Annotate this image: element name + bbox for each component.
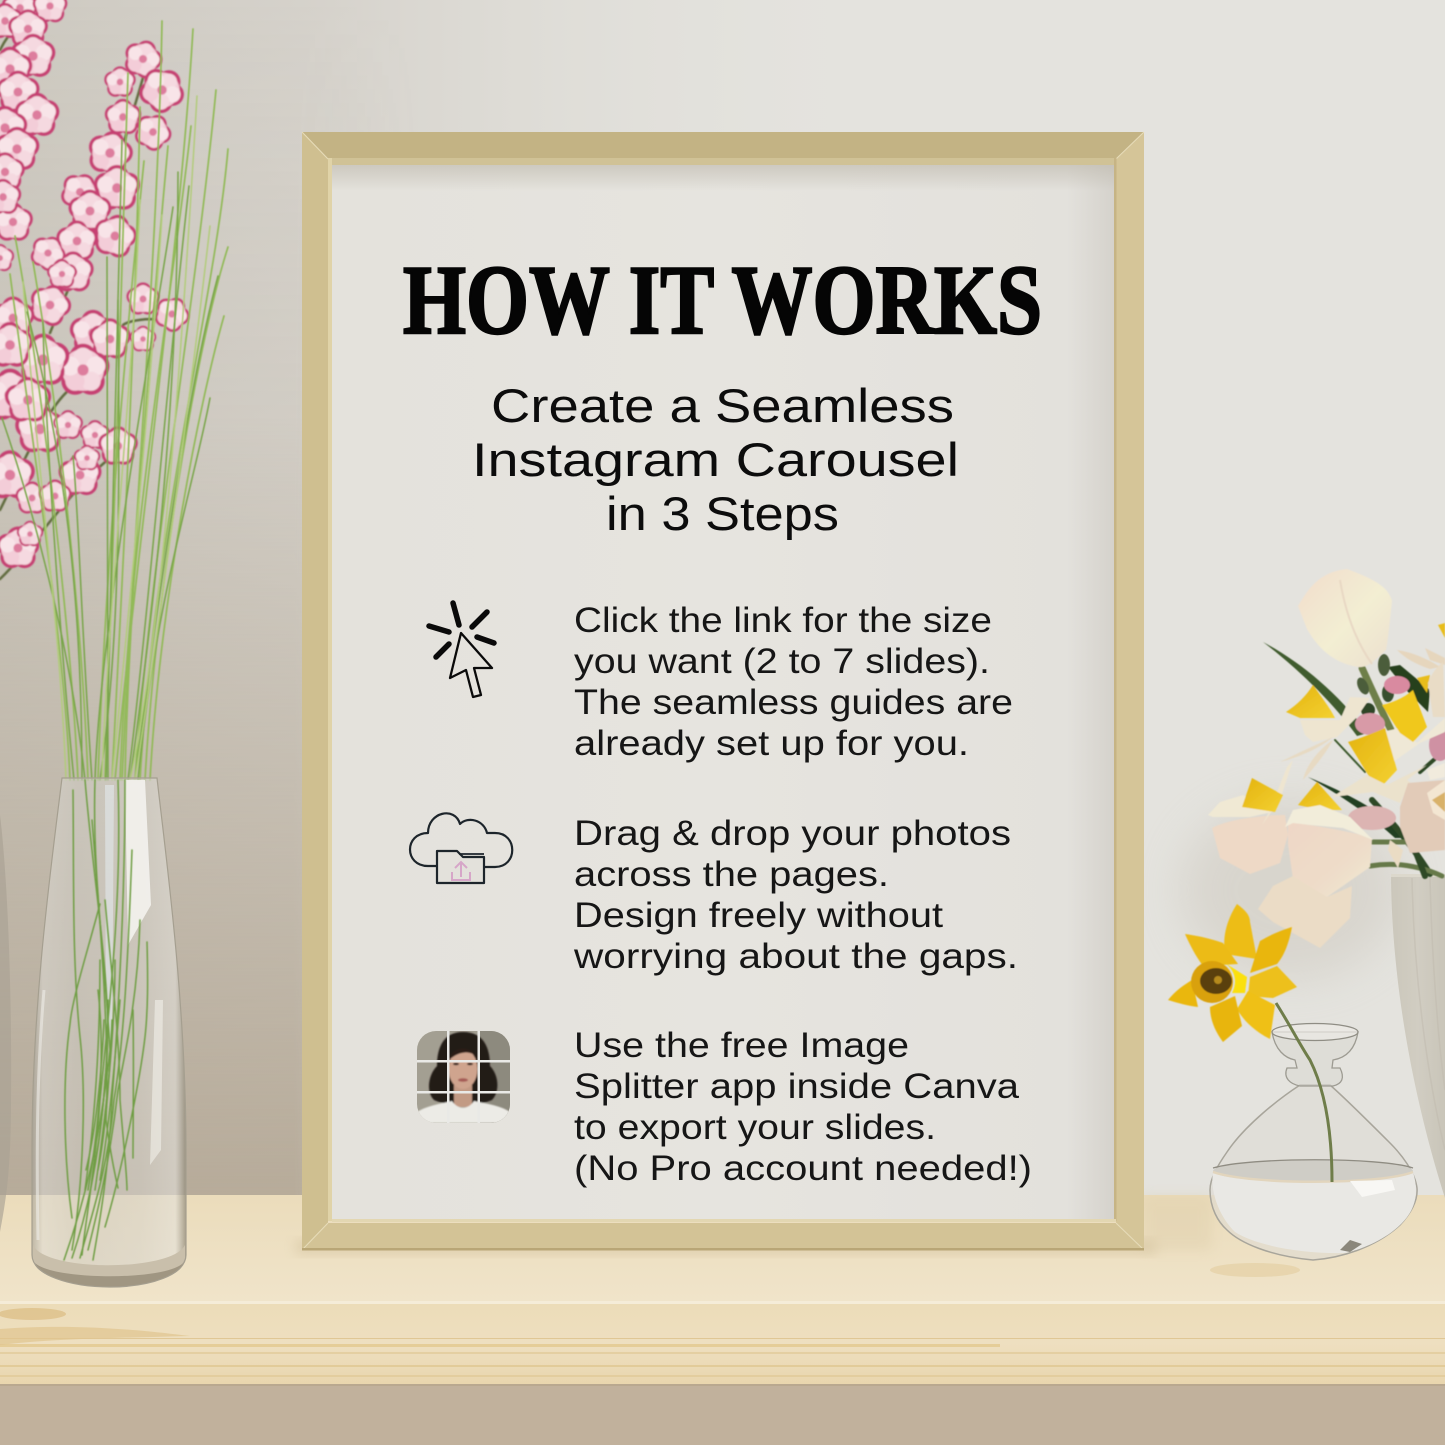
- icon: cursor click: [429, 603, 494, 697]
- middle blossom cluster: [0, 297, 138, 568]
- green leaves and stems: [1263, 642, 1445, 876]
- step 2 text: Design freely without: [574, 896, 943, 935]
- yellow daffodil cup center: [1298, 782, 1342, 810]
- left peach tulip: [1208, 760, 1293, 874]
- right peach tulip: [1388, 763, 1445, 868]
- frame sides: [302, 132, 1144, 159]
- ribbed cream vase at right edge: [1391, 874, 1445, 1198]
- frame drop shadow: [296, 1195, 1212, 1254]
- yellow daffodil: [1168, 904, 1297, 1042]
- step 1 text: you want (2 to 7 slides).: [574, 642, 990, 681]
- small glass vase with water: [1210, 1003, 1417, 1260]
- base of vase: [33, 1245, 185, 1287]
- vase neck and cup: [1272, 1032, 1358, 1086]
- subtitle: in 3 Steps: [606, 487, 839, 540]
- step 2: [410, 813, 1018, 976]
- top-left blossom cluster: [0, 0, 67, 271]
- poster frame: [302, 132, 1144, 1250]
- stems inside vase: [64, 780, 148, 1260]
- glass body: [1210, 1085, 1417, 1260]
- left background vase edge: [0, 815, 11, 1232]
- step 1 text: already set up for you.: [574, 724, 969, 763]
- main blossom sprig: [24, 35, 196, 351]
- green grass stems above vase: [2, 21, 228, 780]
- step 1 text: Click the link for the size: [574, 601, 992, 640]
- water in vase: [1212, 1172, 1416, 1253]
- step 3 text: Use the free Image: [574, 1026, 909, 1065]
- subtitle: Instagram Carousel: [472, 433, 959, 486]
- vase highlight: [125, 780, 151, 945]
- step 3 text: [574, 1026, 1032, 1188]
- daffodil with cream petals, left: [1280, 685, 1370, 780]
- glass vase with stems: [32, 778, 186, 1287]
- step 3 text: Splitter app inside Canva: [574, 1067, 1020, 1106]
- step 1 text: The seamless guides are: [574, 683, 1013, 722]
- icon: cloud folder upload: [410, 813, 512, 883]
- center pale tulip: [1285, 805, 1373, 897]
- white poster: [332, 165, 1114, 1221]
- step 3: [417, 1026, 1032, 1188]
- step 2 text: across the pages.: [574, 855, 889, 894]
- step 1: [429, 601, 1013, 763]
- subtitle: Create a Seamless: [491, 379, 954, 432]
- step 2 text: worrying about the gaps.: [573, 937, 1018, 976]
- title: HOW IT WORKS: [403, 246, 1042, 355]
- subtitle: [472, 379, 959, 540]
- step 2 text: [573, 814, 1018, 976]
- pale tulip top: [1298, 569, 1392, 667]
- step 3 text: (No Pro account needed!): [574, 1149, 1032, 1188]
- icon: portrait split into grid: [417, 1031, 510, 1123]
- flower bouquet: [1208, 569, 1445, 948]
- lower tulip: [1258, 876, 1352, 948]
- long petals at top right: [1397, 623, 1445, 717]
- branch stems: [0, 5, 158, 579]
- pink background flowers: [1348, 676, 1445, 830]
- wooden shelf: [0, 1195, 1445, 1445]
- step 1 text: [574, 601, 1013, 763]
- daffodil with cream petals, right: [1332, 690, 1445, 803]
- pink blossom branches: [0, 0, 196, 579]
- step 2 text: Drag & drop your photos: [574, 814, 1011, 853]
- flower stem in vase: [1276, 1003, 1332, 1182]
- step 3 text: to export your slides.: [574, 1108, 936, 1147]
